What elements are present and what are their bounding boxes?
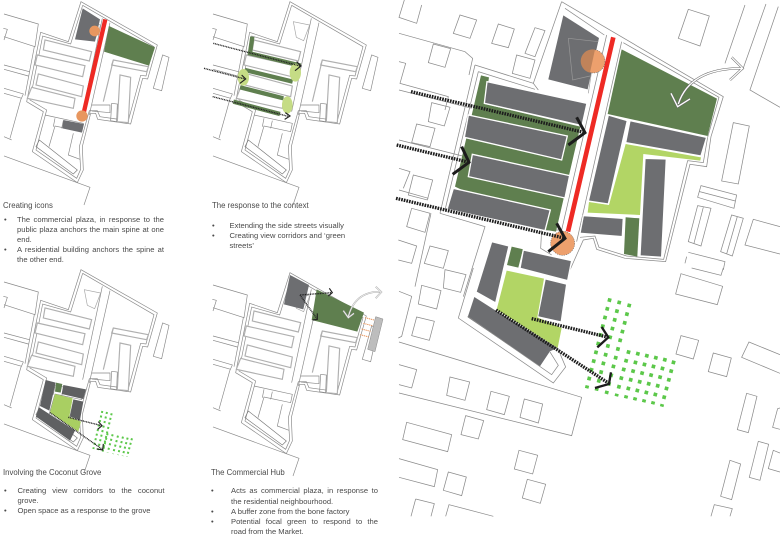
text: involving the coconut grove: [3, 468, 164, 515]
text: end.: [17, 235, 32, 244]
text: The Commercial Hub: [211, 468, 285, 477]
curved arrow: [343, 287, 381, 318]
top plaza circle: [89, 26, 100, 36]
residential building: [62, 120, 84, 133]
red spine: [568, 37, 613, 232]
dotted corridors to the grove: [496, 310, 608, 383]
text: A buffer zone from the bone factory: [231, 507, 349, 516]
text: •: [4, 486, 7, 495]
panel: commercial hub plan: [212, 273, 383, 476]
commercial building: [284, 275, 309, 309]
grey buildings south: [468, 280, 566, 366]
small green: [55, 383, 62, 393]
bone factory: [368, 317, 383, 352]
text: Creating view corridors and ‘green: [230, 231, 345, 240]
text: The commercial plaza, in response to the: [17, 215, 164, 224]
residential buildings: [36, 380, 86, 441]
text: •: [211, 517, 214, 526]
text: •: [4, 245, 7, 254]
green hub: [104, 26, 155, 66]
text: Creating view corridors to the coconut: [18, 486, 164, 495]
text: the residential neighbourhood.: [231, 496, 333, 506]
south small green: [507, 247, 523, 268]
dotted view corridors: [396, 92, 585, 238]
text: •: [4, 215, 7, 224]
commercial plaza building: [75, 8, 100, 42]
panel: coconut grove plan: [3, 270, 169, 473]
plaza inner outline: [568, 38, 598, 80]
text: grove.: [18, 496, 39, 505]
context buildings and roads: [398, 0, 780, 297]
text: •: [211, 486, 214, 495]
plaza circle top: [581, 49, 605, 73]
open space: [50, 394, 81, 432]
chevrons: [595, 327, 611, 388]
red spine: [84, 19, 105, 112]
curved white arrow: [671, 57, 743, 107]
panel: creating icons plan: [3, 2, 169, 205]
green streets: [233, 37, 301, 114]
green hub: [312, 289, 364, 332]
text: streets’: [230, 241, 254, 250]
text: Creating icons: [3, 201, 53, 210]
east small green: [624, 217, 639, 257]
text: the other end.: [17, 255, 64, 264]
text: •: [212, 221, 215, 230]
text: Acts as commercial plaza, in response to: [231, 486, 378, 495]
chevrons: [453, 117, 585, 252]
text: •: [212, 231, 215, 240]
plaza circle bottom: [551, 231, 575, 255]
dotted arrows: [300, 288, 332, 320]
open space south: [497, 271, 562, 348]
lower context lines: [398, 268, 780, 516]
coconut grove dots: [93, 411, 132, 457]
residential green: [455, 75, 580, 232]
grey buildings: [447, 15, 707, 303]
text: public plaza anchors the main spine at one: [17, 225, 164, 234]
text: The response to the context: [212, 201, 309, 210]
commercial green: [608, 49, 717, 136]
text: response to the context: [212, 201, 345, 250]
light green open space: [588, 144, 701, 215]
text: creating icons: [3, 201, 164, 264]
light green nodes: [238, 64, 301, 114]
text: road from the Market.: [231, 527, 304, 536]
text: the commercial hub: [211, 468, 378, 536]
text: A residential building anchors the spine at: [17, 245, 164, 254]
dark green spaces: [455, 49, 717, 268]
text: •: [4, 506, 7, 515]
dotted view arrows: [204, 43, 301, 119]
text: Involving the Coconut Grove: [3, 468, 101, 477]
panel: response to context plan: [204, 2, 378, 205]
text: Open space as a response to the grove: [18, 506, 150, 515]
panel: main site plan: [396, 0, 780, 366]
text: Extending the side streets visually: [230, 221, 344, 230]
view corridor arrows: [50, 413, 103, 450]
bottom plaza circle: [76, 110, 88, 122]
coconut grove dots: [587, 298, 674, 407]
panel: main plan lower context and coconut grove: [398, 268, 780, 516]
buffer dashes: [360, 318, 374, 337]
text: •: [211, 507, 214, 516]
text: Potential focal green to respond to the: [231, 517, 378, 526]
